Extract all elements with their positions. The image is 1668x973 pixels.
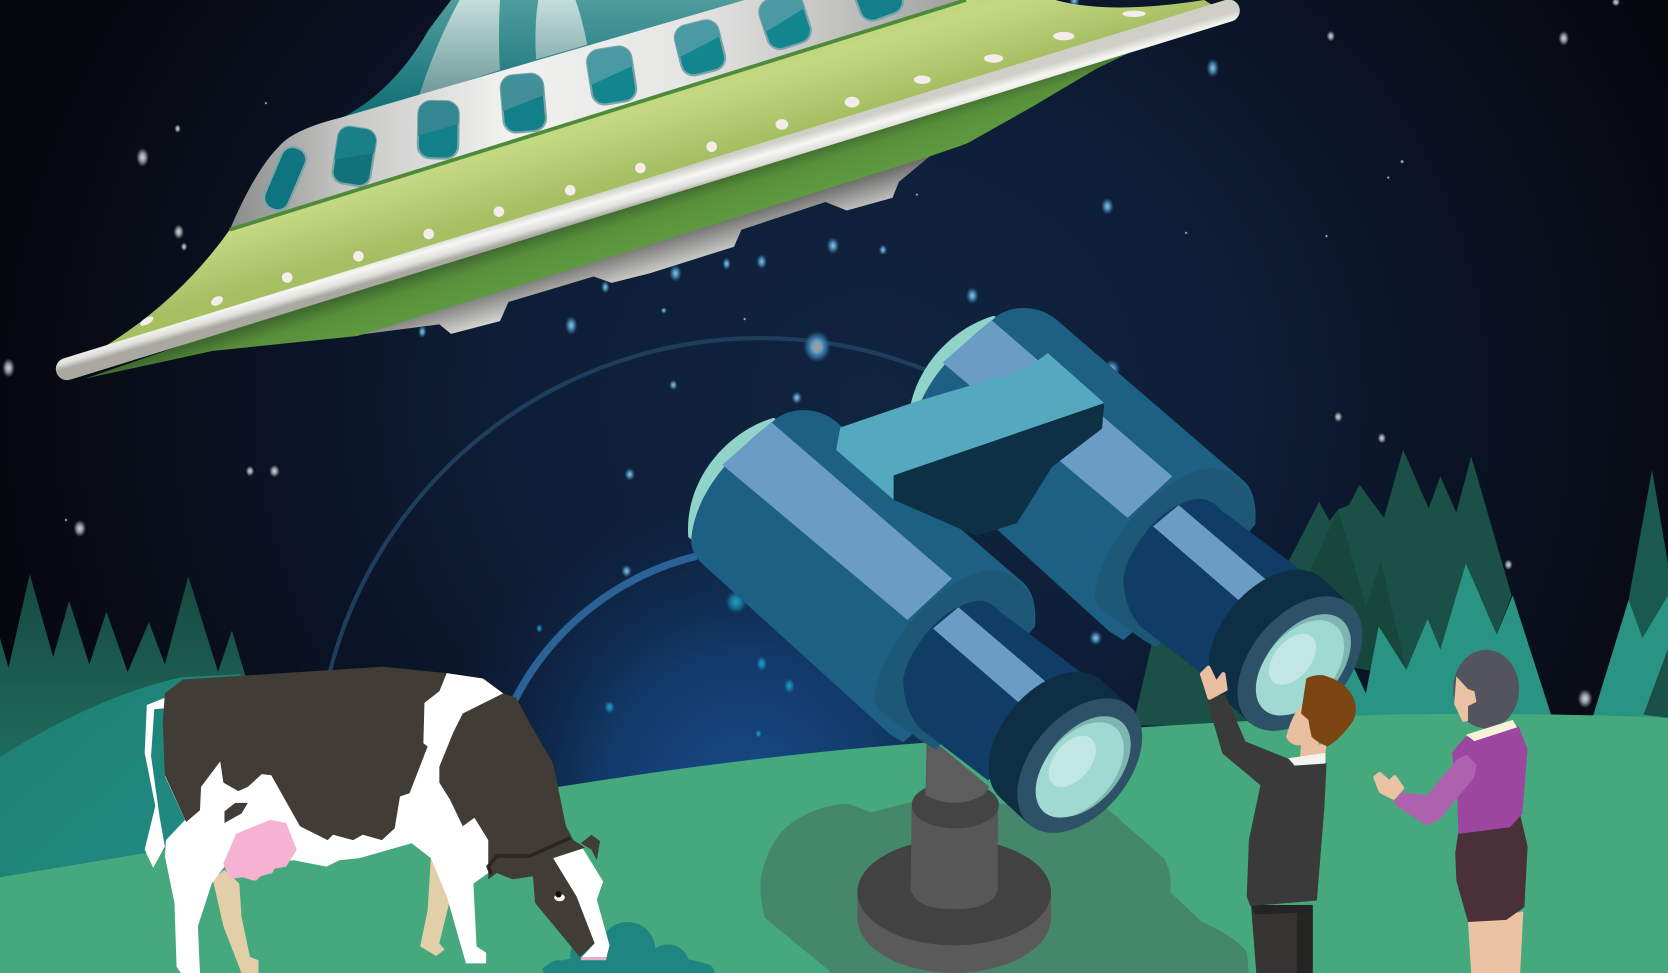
saucer green underside bbox=[85, 21, 1213, 379]
woman's face bbox=[1454, 676, 1477, 722]
cow ear bbox=[581, 835, 600, 860]
saucer windows bbox=[260, 0, 907, 214]
woman's arm bbox=[1396, 757, 1474, 823]
trees: far right dark tree bbox=[1629, 470, 1668, 681]
binoculars bridge bbox=[836, 353, 1104, 536]
woman's hair bbox=[1453, 650, 1519, 728]
saucer green trim line bbox=[230, 0, 966, 230]
stars bbox=[2, 0, 1620, 738]
woman watching bbox=[1375, 650, 1528, 973]
cow nose bbox=[581, 957, 606, 960]
trees: left row bbox=[0, 574, 247, 766]
man's face bbox=[1286, 697, 1319, 745]
binoculars stand bbox=[857, 741, 1051, 973]
saucer underside gray pods bbox=[357, 156, 930, 335]
cow eye bbox=[554, 891, 565, 901]
trees: darker tree layer bbox=[1308, 509, 1406, 670]
saucer white rim bbox=[67, 11, 1229, 369]
blue sky glow near the horizon bbox=[404, 468, 1085, 973]
cow neck and head bbox=[439, 693, 595, 957]
bush under cow's head bbox=[543, 922, 715, 973]
saucer lime deck bbox=[74, 0, 1218, 367]
man's jacket bbox=[1208, 695, 1325, 905]
man's trousers bbox=[1251, 905, 1313, 973]
saucer hull bbox=[230, 0, 966, 230]
cow face blaze bbox=[553, 849, 610, 958]
woman's hand bbox=[1375, 774, 1402, 798]
man's shirt collar bbox=[1288, 753, 1325, 766]
woman's legs bbox=[1468, 911, 1523, 973]
left teal hill bbox=[0, 674, 240, 888]
cow white body bbox=[165, 673, 532, 973]
green ground bbox=[0, 714, 1668, 973]
small bright orbit arc bbox=[515, 556, 697, 700]
saucer dome bbox=[344, 0, 750, 133]
woman's skirt bbox=[1455, 815, 1528, 922]
right binocular barrel bbox=[908, 308, 1387, 754]
cow far legs bbox=[213, 870, 258, 973]
cow flank spot bbox=[224, 803, 248, 823]
man's hand bbox=[1202, 668, 1225, 698]
large orbit arc bbox=[330, 338, 936, 672]
woman's collar bbox=[1466, 720, 1517, 741]
trees: right teal group bbox=[1319, 564, 1552, 723]
flying saucer bbox=[67, 0, 1229, 379]
cow udder bbox=[223, 820, 297, 880]
man looking through binoculars bbox=[1202, 668, 1356, 973]
cow collar bbox=[488, 838, 570, 874]
tree behind binoculars bbox=[1133, 622, 1303, 728]
trees: small dark tree at far right bbox=[1644, 649, 1668, 718]
woman's sweater bbox=[1453, 727, 1527, 833]
left binocular barrel bbox=[688, 410, 1167, 857]
saucer rivets bbox=[139, 11, 1146, 328]
cow tail bbox=[145, 697, 168, 868]
binoculars shadow on the ground bbox=[760, 802, 1249, 973]
man's hair bbox=[1301, 675, 1356, 746]
cow bbox=[145, 667, 610, 973]
trees: teal tree at far right bbox=[1592, 595, 1668, 718]
cow dark rear patch bbox=[163, 667, 447, 840]
trees: right dark group bbox=[1282, 450, 1512, 670]
man's neck bbox=[1300, 744, 1327, 758]
